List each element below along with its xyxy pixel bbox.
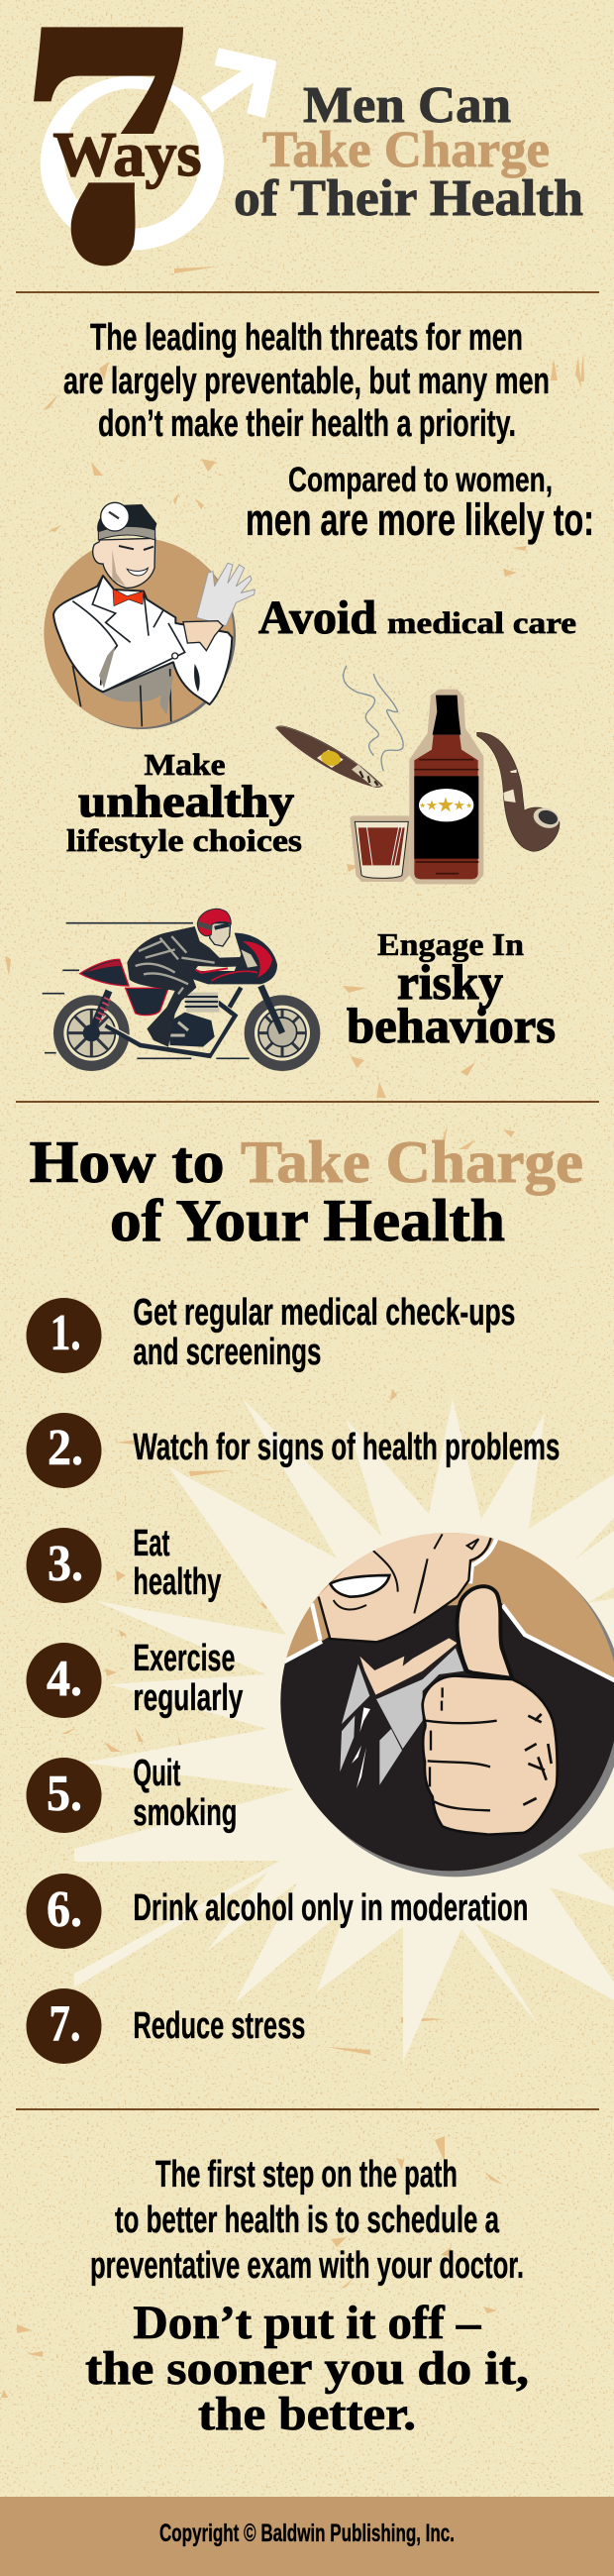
eye — [330, 1575, 389, 1597]
side panel — [126, 988, 168, 1016]
shock absorber — [94, 991, 109, 1025]
text: engage in risky behaviors: risky — [397, 954, 503, 1010]
title text: Take Charge — [262, 122, 550, 178]
fist — [423, 1676, 558, 1835]
step 5: smoking — [133, 1792, 237, 1834]
step 3: Eat — [133, 1523, 170, 1564]
speed lines — [43, 923, 250, 1058]
frame, exhaust and engine — [106, 988, 241, 1056]
neck — [359, 1638, 458, 1695]
text: avoid medical care — [258, 591, 576, 644]
hand — [183, 621, 223, 651]
numeral 7 — [34, 27, 183, 266]
icon: glass of whiskey — [350, 815, 409, 882]
step 4 — [26, 1638, 243, 1719]
text: make unhealthy lifestyle choices: lifestyle choices — [66, 822, 302, 858]
step 3: 3. — [48, 1536, 83, 1592]
closing call to action: Don’t put it off – — [133, 2297, 481, 2349]
step 5: Quit — [133, 1753, 181, 1794]
step 6 — [26, 1874, 528, 1949]
section heading: Take Charge — [241, 1129, 583, 1195]
step 7 — [26, 1988, 305, 2064]
icon: whiskey bottle — [409, 690, 483, 884]
section heading: How to — [30, 1129, 225, 1195]
rear wheel — [53, 995, 130, 1071]
step 7: 7. — [50, 1995, 81, 2053]
list: seven steps — [26, 1292, 560, 2064]
step 3 — [26, 1523, 221, 1603]
thumb — [458, 1586, 512, 1678]
section heading: of Your Health — [110, 1188, 505, 1253]
tail section — [80, 959, 129, 986]
text: engage in risky behaviors: behaviors — [347, 998, 556, 1053]
word: Ways: Ways — [53, 119, 202, 189]
intro text — [63, 317, 550, 445]
rider — [127, 926, 250, 1047]
fairing — [171, 933, 277, 984]
text: engage in risky behaviors: Engage In — [377, 926, 524, 962]
step 4: Exercise — [133, 1638, 235, 1679]
illustration: man giving thumbs up — [277, 1526, 614, 1877]
text: avoid medical care: Avoid — [258, 591, 376, 644]
helmet and face — [210, 923, 231, 946]
title text — [234, 77, 583, 227]
icon: cigar — [275, 726, 383, 788]
text: avoid medical care: medical care — [387, 605, 576, 640]
step 5 — [26, 1753, 237, 1834]
step 1: 1. — [51, 1305, 81, 1361]
illustration: motorcycle rider — [43, 909, 320, 1071]
step 2 — [26, 1413, 560, 1488]
comparison lead-in — [246, 461, 594, 545]
closing call to action — [85, 2297, 529, 2440]
step 4: regularly — [133, 1677, 243, 1719]
icon: male symbol — [41, 48, 276, 251]
text: make unhealthy lifestyle choices — [66, 747, 302, 858]
step 1 — [26, 1292, 515, 1373]
sunburst behind thumbs-up — [74, 1399, 614, 2062]
title text: Men Can — [303, 77, 511, 134]
suit — [277, 1603, 614, 1876]
footer band: Copyright © Baldwin Publishing, Inc. — [159, 2520, 455, 2547]
closing call to action: the sooner you do it, — [85, 2342, 529, 2395]
title logo: 7 Ways with male symbol — [34, 27, 276, 266]
title text: of Their Health — [234, 170, 583, 227]
footer band — [0, 2497, 614, 2576]
front wheel — [245, 995, 320, 1071]
step 3: healthy — [133, 1561, 221, 1603]
closing text — [90, 2154, 524, 2287]
step 1: and screenings — [133, 1332, 321, 1373]
step 6: 6. — [47, 1881, 82, 1938]
bow tie — [113, 589, 144, 606]
section heading — [30, 1129, 583, 1253]
step 5: 5. — [47, 1766, 82, 1822]
glove — [196, 563, 255, 626]
step 2: 2. — [48, 1420, 83, 1476]
step 4: 4. — [47, 1651, 82, 1707]
illustration: doctor putting on glove — [44, 502, 255, 729]
head — [93, 538, 155, 588]
text: make unhealthy lifestyle choices: unhealthy — [78, 776, 294, 826]
text: make unhealthy lifestyle choices: Make — [145, 747, 226, 782]
closing text: The first step on the path — [155, 2154, 458, 2196]
illustration: cigar, whiskey and pipe — [275, 666, 562, 884]
step 7: Reduce stress — [133, 2005, 305, 2047]
coat — [53, 576, 232, 704]
head — [319, 1526, 492, 1642]
icon: pipe — [477, 732, 562, 851]
text: engage in risky behaviors — [347, 926, 556, 1053]
closing call to action: the better. — [198, 2388, 416, 2440]
collar — [340, 1648, 463, 1785]
icon: smoke — [344, 666, 403, 771]
